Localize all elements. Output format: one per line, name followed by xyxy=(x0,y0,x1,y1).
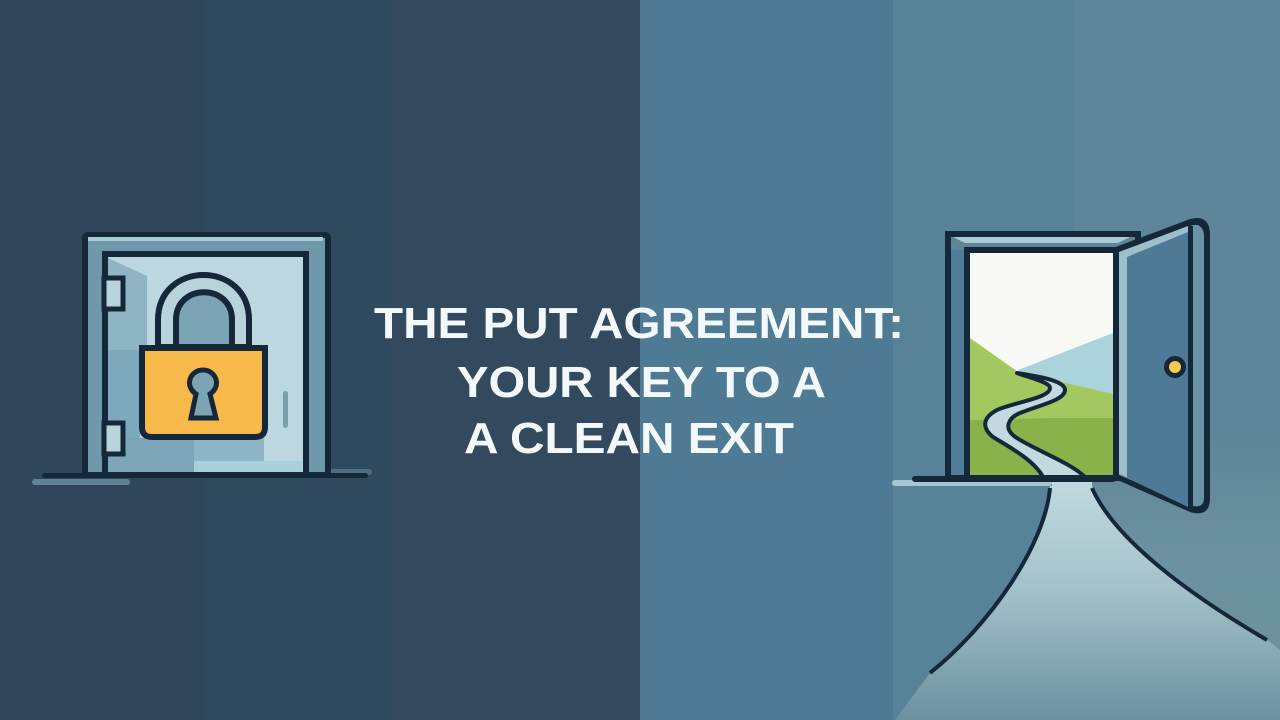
landscape through doorway xyxy=(967,250,1116,478)
icon: locked safe with padlock xyxy=(32,235,372,485)
light path on floor xyxy=(895,486,1280,720)
door floor line xyxy=(892,476,1116,486)
safe floor shadow lines xyxy=(32,469,372,485)
open door leaf xyxy=(1113,218,1210,513)
title: THE PUT AGREEMENT: xyxy=(374,299,904,348)
title: YOUR KEY TO A xyxy=(457,358,826,407)
title xyxy=(374,299,904,463)
padlock xyxy=(142,275,265,437)
safe body xyxy=(85,235,328,475)
title: A CLEAN EXIT xyxy=(464,414,794,463)
floor to the right of the path xyxy=(1090,440,1280,720)
icon: open door with path xyxy=(892,218,1280,720)
winding path xyxy=(985,373,1085,477)
door frame xyxy=(948,234,1138,478)
